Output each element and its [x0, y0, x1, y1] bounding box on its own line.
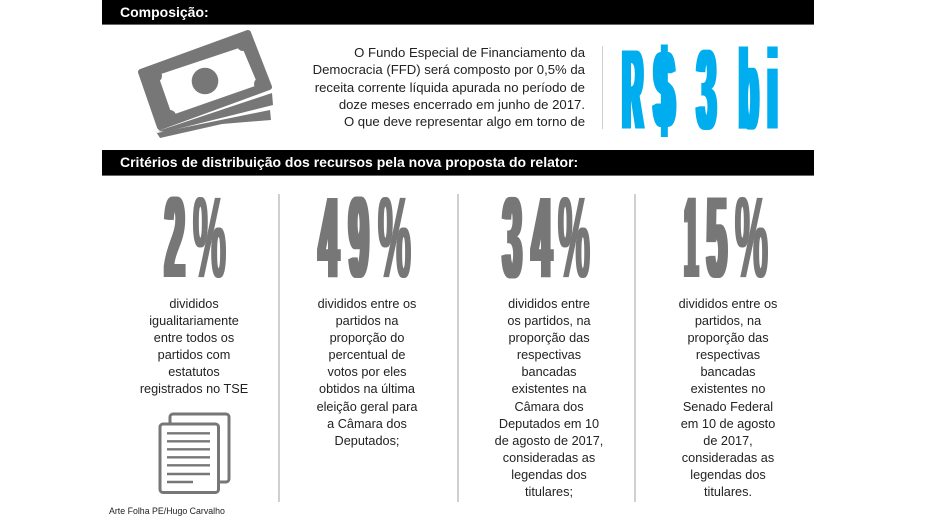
text: 15%: divididos entre os partidos, na proporção das respectivas bancadas existentes no Senado Federal em 10 de agosto de 2017, consideradas as legendas dos titulares.	[679, 297, 777, 499]
divider	[602, 46, 603, 129]
icon: banknotes	[138, 30, 273, 138]
header bar: composição: Composição:	[120, 4, 209, 20]
header bar: composição	[102, 0, 814, 25]
divider	[278, 194, 280, 502]
text: 2%: divididos igualitariamente entre todos os partidos com estatutos registrados no TSE	[140, 297, 248, 396]
credit: Arte Folha PE/Hugo Carvalho	[109, 506, 225, 516]
text block: composição: O Fundo Especial de Financiamento da Democracia (FFD) será composto por 0,5% da receita corrente líquida apurada no período de doze meses encerrado em junho de 2017. O que deve representar algo em torno de	[313, 45, 585, 129]
text: 49%: divididos entre os partidos na proporção do percentual de votos por eles obtidos na última eleição geral para a Câmara dos Deputados;	[317, 297, 417, 448]
divider	[634, 194, 636, 502]
icon: documents	[158, 412, 230, 494]
percentages	[164, 174, 768, 290]
big value: R$ 3 bi	[622, 26, 778, 145]
header bar: critérios: Critérios de distribuição dos recursos pela nova proposta do relator:	[120, 154, 578, 170]
divider	[457, 194, 459, 502]
header bar: critérios	[102, 150, 814, 176]
text: 34%: divididos entre os partidos, na proporção das respectivas bancadas existentes na Câmara dos Deputados em 10 de agosto de 2017, consideradas as legendas dos titulares;	[495, 297, 603, 499]
